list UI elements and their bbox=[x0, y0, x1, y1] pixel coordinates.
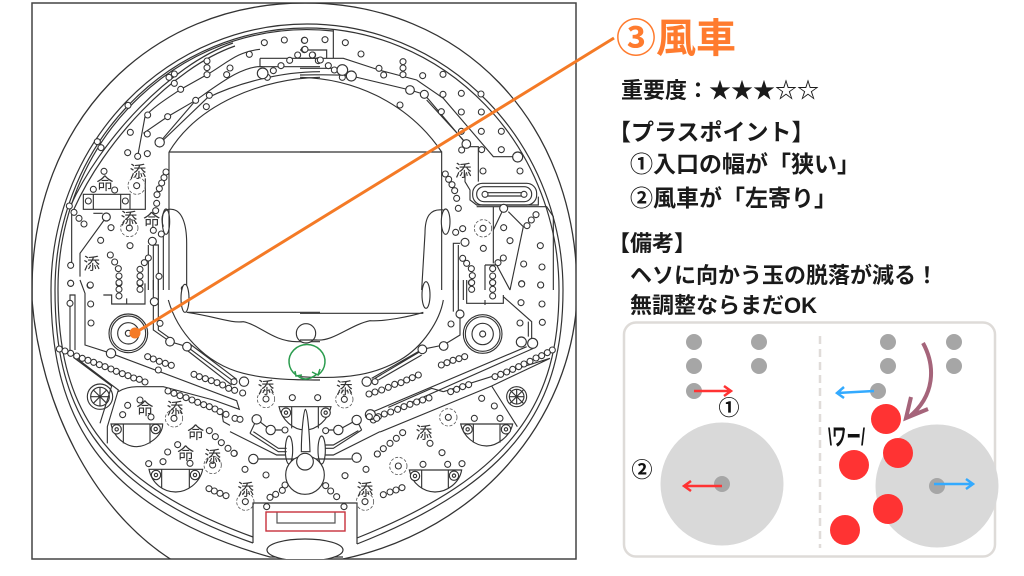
arrow: windmill left bbox=[684, 481, 722, 491]
outer frame bbox=[32, 3, 576, 559]
arrow: windmill right bbox=[934, 479, 973, 489]
lower left quadrant of board bbox=[56, 280, 320, 510]
title: ③風車 bbox=[616, 17, 736, 61]
lower right quadrant of board: 添 bbox=[357, 480, 374, 499]
plus points text bbox=[608, 119, 860, 211]
lower left quadrant of board: 添 bbox=[258, 378, 275, 397]
playfield rim rails bbox=[51, 24, 563, 561]
fan left bbox=[87, 384, 113, 409]
lower right quadrant of board bbox=[300, 280, 555, 510]
exclamation text: \ワー/ bbox=[828, 424, 865, 451]
lower left quadrant of board: 命 bbox=[177, 444, 194, 463]
pockets left bbox=[111, 424, 203, 492]
pockets right bbox=[409, 424, 513, 492]
remarks text: 無調整ならまだOK bbox=[630, 293, 817, 318]
lower left quadrant of board: 添 bbox=[167, 399, 184, 418]
green rotation arrows bbox=[289, 345, 325, 379]
upper left quadrant of board: 添 bbox=[121, 209, 138, 228]
lower left quadrant of board: 命 bbox=[187, 423, 204, 442]
divider dashed line bbox=[819, 336, 821, 548]
upper left quadrant of board: 命 bbox=[97, 174, 114, 193]
explanation panel bbox=[624, 322, 998, 556]
orange leader line with dot bbox=[130, 38, 614, 338]
outer board curve bbox=[32, 3, 577, 562]
remarks text bbox=[608, 231, 938, 318]
red balls bbox=[830, 404, 913, 545]
plus points text: 【プラスポイント】 bbox=[608, 119, 815, 145]
arrow: narrow entrance bbox=[694, 386, 731, 396]
right layout: nails and windmill bbox=[870, 334, 998, 548]
board diagram bbox=[32, 3, 577, 562]
upper right quadrant of board: 添 bbox=[455, 162, 472, 181]
marker 1: ① bbox=[718, 397, 740, 420]
centre plunger and start pocket bbox=[230, 395, 380, 510]
left layout: nails and windmill bbox=[660, 334, 784, 546]
arrow: wide entrance bbox=[837, 387, 874, 398]
curved ball-flow arrow bbox=[906, 343, 931, 418]
plus points text: ①入口の幅が「狭い」 bbox=[630, 151, 860, 177]
lower left quadrant of board: 命 bbox=[137, 399, 154, 418]
upper left quadrant of board: 添 bbox=[83, 254, 100, 273]
lower left quadrant of board: 添 bbox=[204, 448, 221, 467]
plus points text: ②風車が「左寄り」 bbox=[630, 185, 837, 211]
remarks text: 【備考】 bbox=[608, 231, 696, 256]
upper left quadrant of board bbox=[66, 37, 321, 292]
upper left quadrant of board: 命 bbox=[143, 211, 160, 230]
red highlight rectangle at bottom bbox=[266, 512, 345, 531]
marker 2: ② bbox=[632, 459, 652, 482]
upper right quadrant of board bbox=[300, 30, 553, 291]
importance rating: 重要度：★★★☆☆ bbox=[621, 78, 819, 103]
lower left quadrant of board: 添 bbox=[237, 480, 254, 499]
lower right quadrant of board: 添 bbox=[336, 379, 353, 398]
remarks text: ヘソに向かう玉の脱落が減る！ bbox=[630, 263, 938, 288]
upper left quadrant of board: 添 bbox=[130, 163, 147, 182]
lower right quadrant of board: 添 bbox=[416, 423, 433, 442]
fan right bbox=[507, 387, 527, 407]
